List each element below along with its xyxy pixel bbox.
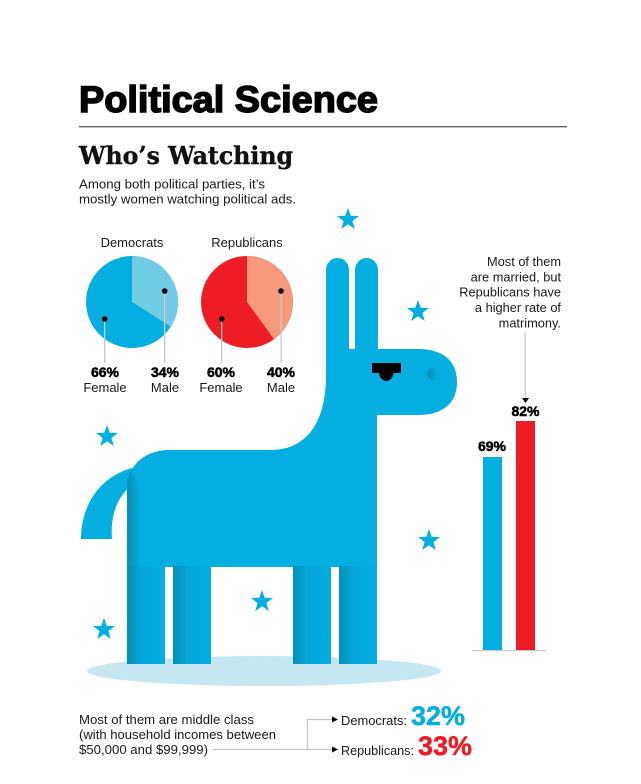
subtitle: Who’s Watching (78, 141, 293, 170)
donkey illustration (81, 258, 457, 664)
tail (81, 467, 136, 539)
stat: Republicans 33% (341, 731, 472, 761)
male marker (162, 288, 168, 363)
male marker (278, 288, 284, 363)
legs (127, 566, 377, 664)
value: 69%: 69% (478, 438, 507, 454)
male label: Male (267, 380, 295, 395)
married callout text: Most of them (487, 254, 561, 269)
callout arrow (522, 332, 529, 403)
stat: Democrats 32%: 32% (411, 701, 465, 731)
female label: Female (83, 380, 127, 395)
married callout text: are married, but (471, 269, 561, 284)
pie heading: Democrats: Democrats (101, 235, 164, 250)
married callout text: a higher rate of (475, 300, 561, 315)
male label (267, 364, 296, 395)
middle class text: (with household incomes between (79, 727, 276, 742)
intro text: mostly women watching political ads. (79, 192, 296, 206)
middle class text: Most of them are middle class (79, 712, 254, 727)
stars (93, 208, 440, 639)
female label: 66% (91, 364, 120, 380)
female marker (219, 316, 224, 363)
pie slices: Democrats (86, 256, 178, 348)
male label: 40% (267, 364, 296, 380)
middle class text: $50,000 and $99,999) (79, 742, 208, 757)
ground shadow (87, 656, 441, 686)
stat: Democrats 32% (341, 701, 465, 731)
bar: Republicans (516, 421, 535, 650)
bar chart: married (472, 403, 546, 651)
married callout text: Republicans have (459, 285, 561, 300)
value: 82%: 82% (511, 403, 540, 419)
pie chart: Democrats (83, 235, 180, 395)
pie chart: Republicans (199, 235, 296, 395)
male label (151, 364, 180, 395)
rear shading (127, 471, 141, 567)
connector arrows (213, 716, 338, 752)
male label: 34% (151, 364, 180, 380)
stat: Republicans 33%: Republicans: (341, 743, 414, 758)
header rule (79, 126, 567, 127)
middle class text (79, 712, 276, 757)
married callout text: matrimony. (499, 315, 561, 330)
female label: Female (199, 380, 243, 395)
nostril (427, 368, 439, 380)
stat: Republicans 33%: 33% (418, 731, 472, 761)
pie slices: Republicans (201, 256, 293, 348)
eye (372, 363, 401, 381)
pie heading: Republicans: Republicans (211, 235, 283, 250)
bar: Democrats (483, 457, 502, 650)
intro text: Among both political parties, it’s (79, 176, 266, 192)
female marker (102, 316, 107, 363)
female label (199, 364, 243, 395)
intro text (79, 176, 296, 206)
married callout text (459, 254, 561, 330)
title: Political Science (79, 79, 378, 120)
stat: Democrats 32%: Democrats: (341, 713, 407, 728)
female label: 60% (207, 364, 236, 380)
body, neck, head and ears (127, 258, 457, 567)
female label (83, 364, 127, 395)
bar baseline (472, 650, 546, 651)
male label: Male (151, 380, 179, 395)
